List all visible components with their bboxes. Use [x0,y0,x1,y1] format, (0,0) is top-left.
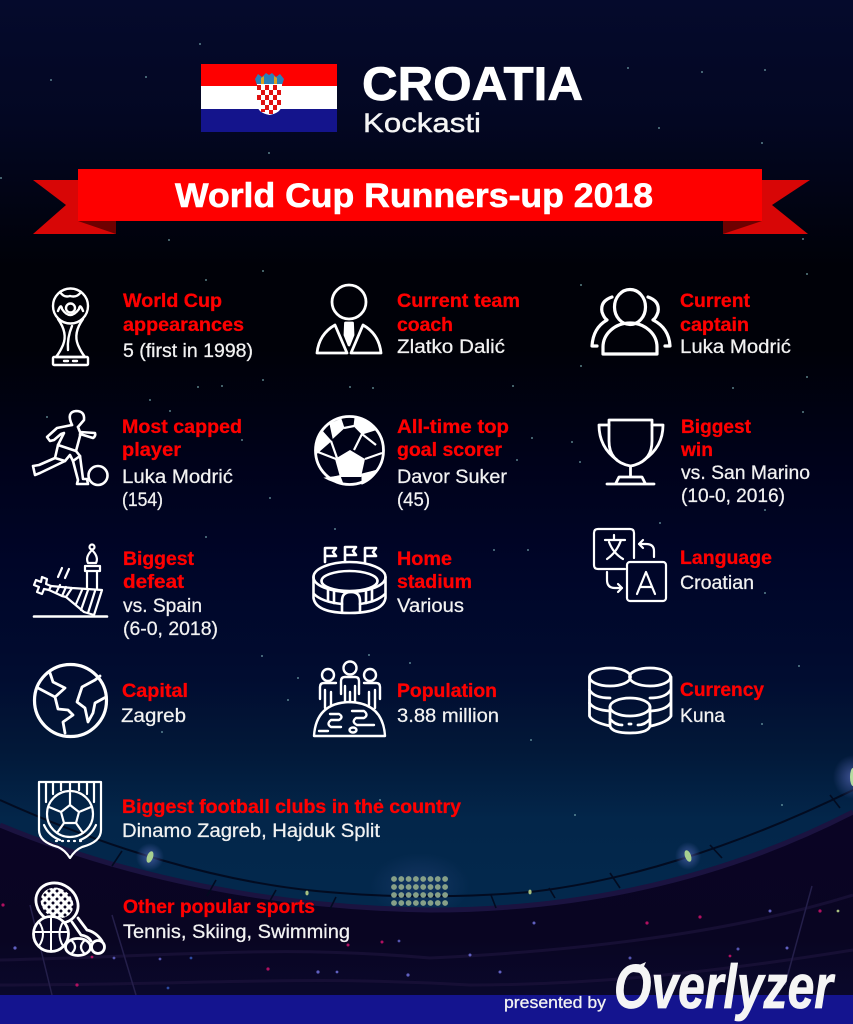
stat: most capped player [33,411,242,511]
label: Luka Modrić [122,467,233,488]
label: player [122,440,182,461]
label: Davor Suker [397,467,508,488]
icon: translate [594,529,666,601]
label: Dinamo Zagreb, Hajduk Split [122,821,381,842]
label: Kuna [680,706,725,727]
icon: toppled chess king [34,544,107,616]
stat: current team coach [317,285,520,358]
label: Zagreb [121,706,186,727]
icon: captain group [592,290,670,354]
label: (45) [397,490,430,511]
label [397,549,472,617]
label: Most capped [122,417,242,438]
ribbon banner [33,169,810,234]
label: Current team [397,291,520,312]
stat: biggest defeat [34,544,218,640]
background: stadium [0,755,853,1024]
icon: player kicking ball [33,411,108,485]
label [123,897,350,943]
label: Current [680,291,751,312]
stat: other popular sports [32,882,349,957]
label: goal scorer [397,440,503,461]
label: vs. San Marino [681,463,810,484]
label [122,797,461,842]
label: Capital [122,681,188,702]
label: Croatian [680,573,754,594]
label: Biggest [681,417,752,438]
label: appearances [123,315,244,336]
icon: people on globe [314,662,385,736]
label: Other popular sports [123,897,315,918]
label [397,417,509,511]
stat: population [314,662,499,736]
label [680,417,810,507]
stat: language [594,529,772,601]
flag of Croatia [201,64,337,132]
label [680,680,764,727]
label: 3.88 million [397,706,499,727]
icon: football crest [39,782,101,858]
label: Zlatko Dalić [397,337,505,358]
label [397,291,520,358]
title: CROATIA [362,57,583,110]
label: Biggest football clubs in the country [122,797,461,818]
label: Tennis, Skiing, Swimming [123,922,350,943]
label: defeat [123,572,185,593]
icon: football [316,416,384,484]
label: Home [397,549,452,570]
background: coloured crowd lights [1,903,839,989]
header [201,57,583,138]
icon: coach [317,285,381,353]
stat: biggest football clubs [39,782,461,858]
label: stadium [397,572,472,593]
label: Biggest [123,549,195,570]
label [123,549,218,640]
label: win [680,440,713,461]
footer: presented by: presented by [504,993,607,1012]
banner heading: World Cup Runners-up 2018 [175,177,653,215]
label: captain [680,315,749,336]
icon: globe [34,664,106,736]
label: World Cup [123,291,222,312]
footer bar [0,995,853,1024]
label [680,291,791,358]
label [397,681,499,727]
stat: home stadium [314,547,472,617]
icon: world cup trophy [53,288,88,365]
label: (154) [122,490,163,511]
subtitle: Kockasti [363,108,481,138]
stat: capital [34,664,188,736]
floodlight panel [391,876,448,906]
label: Luka Modrić [680,337,791,358]
stat: current captain [592,290,791,358]
label: coach [397,315,453,336]
label [123,291,253,362]
label [680,548,772,594]
label: All-time top [397,417,509,438]
icon: trophy cup [599,420,663,484]
label: (6-0, 2018) [123,619,218,640]
background: stars [0,43,808,816]
label: (10-0, 2016) [681,486,785,507]
stat: World Cup appearances [53,288,253,365]
label [122,417,242,511]
label: 5 (first in 1998) [123,341,253,362]
label: Various [397,596,464,617]
icon: stadium [314,547,386,613]
label [121,681,188,727]
icon: racket and balls [32,882,106,957]
label: Language [680,548,772,569]
stat: top goal scorer [316,416,509,511]
label: vs. Spain [123,596,202,617]
stat: currency [590,668,764,733]
label: Population [397,681,497,702]
icon: coin stacks [590,668,671,733]
stat: biggest win [599,417,810,507]
label: Currency [680,680,764,701]
